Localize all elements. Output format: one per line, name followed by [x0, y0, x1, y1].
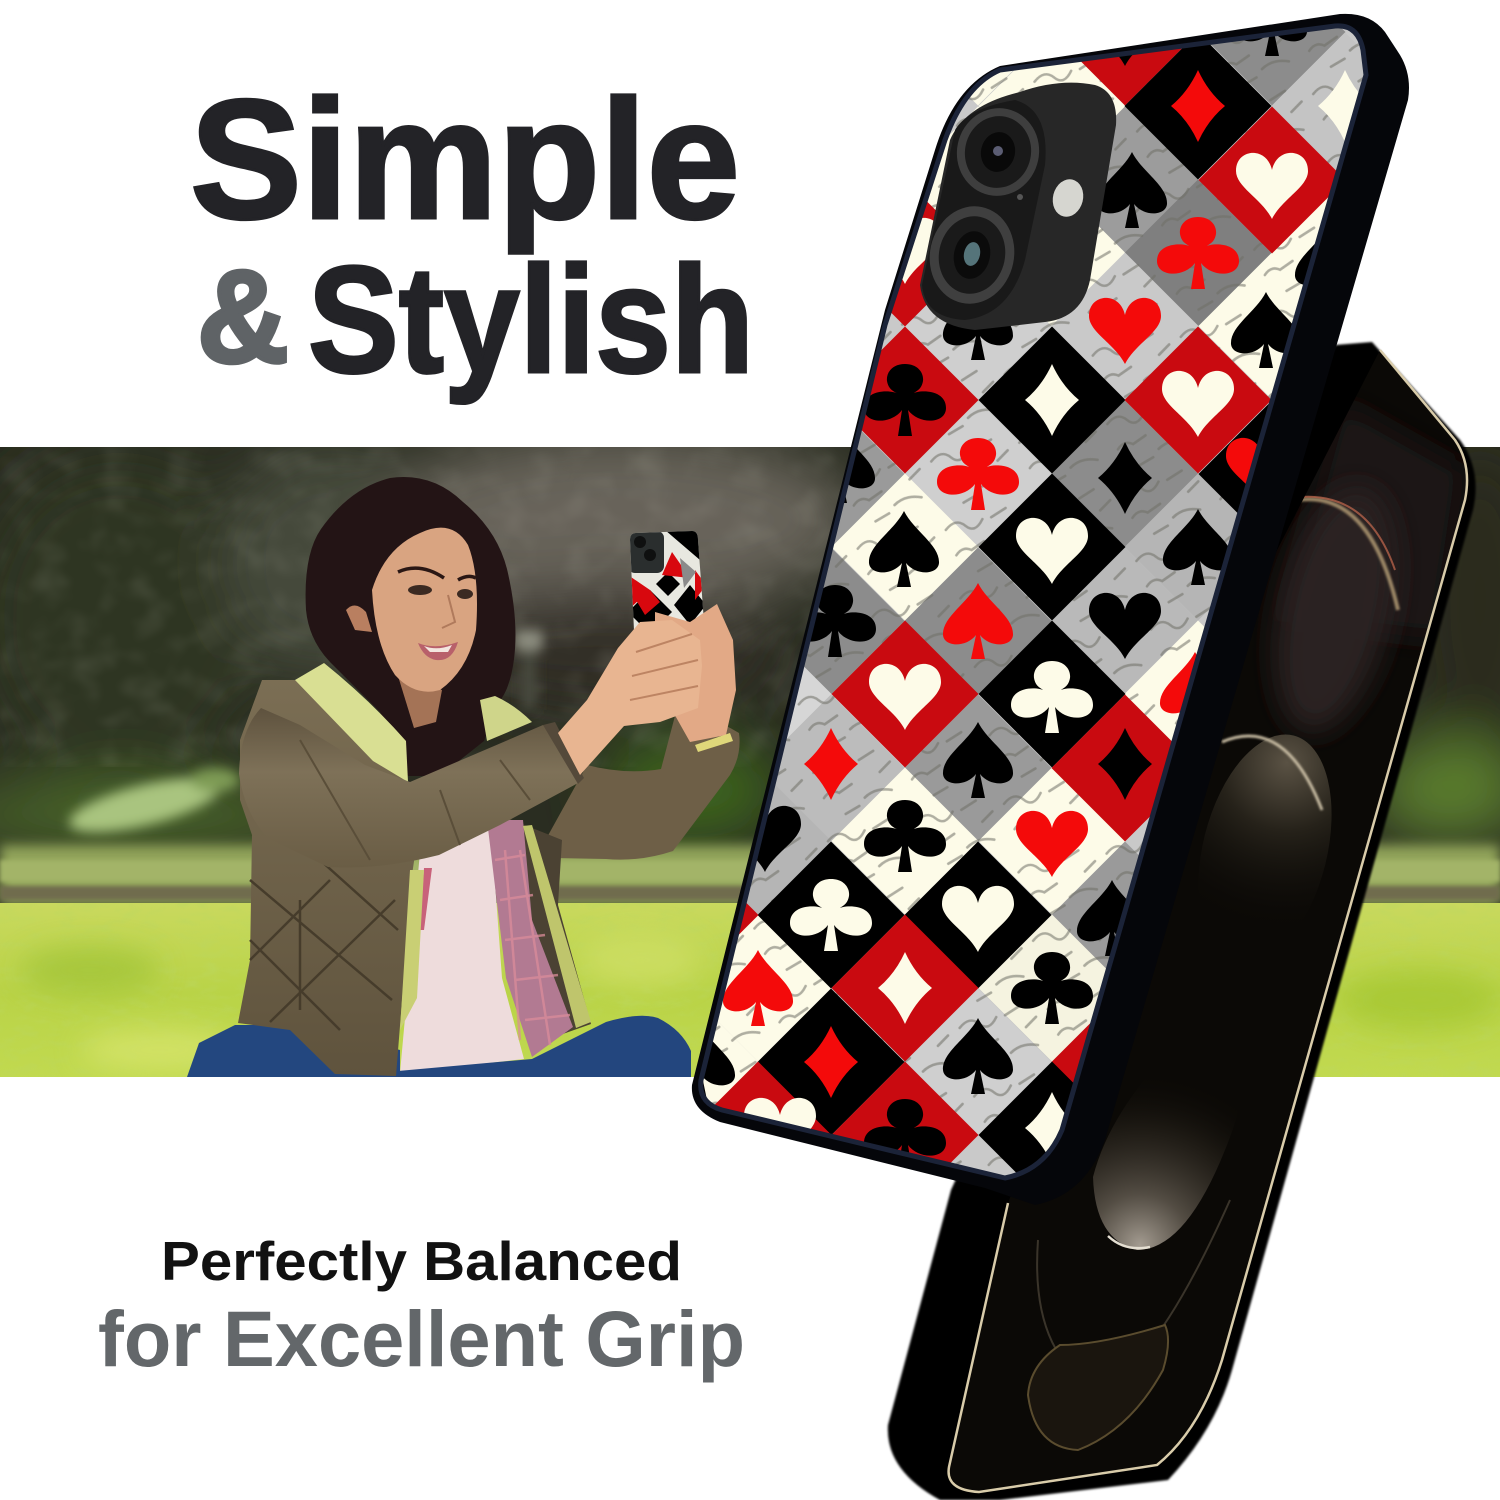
photo background: park [0, 430, 1500, 1083]
neck [398, 676, 442, 728]
microphone dot [1017, 194, 1023, 200]
face [372, 528, 477, 692]
mini phone [630, 531, 704, 630]
plaid lines [495, 850, 570, 1045]
collar right [480, 696, 532, 741]
phone screen wallpaper [940, 340, 1480, 1500]
nose [442, 595, 455, 628]
title: Stylish: Stylish [308, 235, 754, 405]
phone silhouette [888, 342, 1476, 1500]
navy rim [701, 26, 1366, 1178]
camera module [920, 83, 1116, 330]
flash [1049, 176, 1087, 220]
plaid shirt [487, 820, 573, 1057]
lower lens [921, 198, 1023, 312]
near hand [558, 620, 702, 775]
card suit symbols [665, 0, 1372, 1171]
near arm sleeve [239, 708, 580, 868]
far hand [655, 604, 736, 742]
jacket quilting [250, 860, 398, 1030]
front phone behind case [888, 340, 1480, 1500]
wrist band [695, 733, 733, 752]
smile [418, 642, 458, 660]
upper lens [949, 100, 1047, 204]
left jeans [187, 1025, 400, 1077]
red and black tiles [612, 0, 1346, 1208]
title: &: & [197, 243, 289, 390]
printed playing-card pattern [703, 28, 1364, 1176]
jacket torso [238, 680, 420, 1076]
jacket right panel [500, 815, 591, 1035]
t-shirt [400, 815, 524, 1073]
right jeans [398, 1016, 691, 1077]
case back [692, 14, 1409, 1196]
yellow lining [400, 870, 424, 1030]
collar left [295, 663, 408, 782]
title: Simple: Simple [190, 65, 740, 255]
far arm sleeve [540, 712, 740, 860]
caption: for Excellent Grip: for Excellent Grip [98, 1294, 745, 1383]
caption: Perfectly Balanced: Perfectly Balanced [161, 1230, 682, 1292]
hair [306, 477, 515, 776]
gold frame line [949, 350, 1467, 1492]
eyes and brows [398, 568, 476, 580]
case body with side thickness [692, 14, 1409, 1205]
light tiles [612, 0, 1418, 1136]
woman taking selfie [187, 477, 740, 1077]
cuff [543, 722, 584, 784]
